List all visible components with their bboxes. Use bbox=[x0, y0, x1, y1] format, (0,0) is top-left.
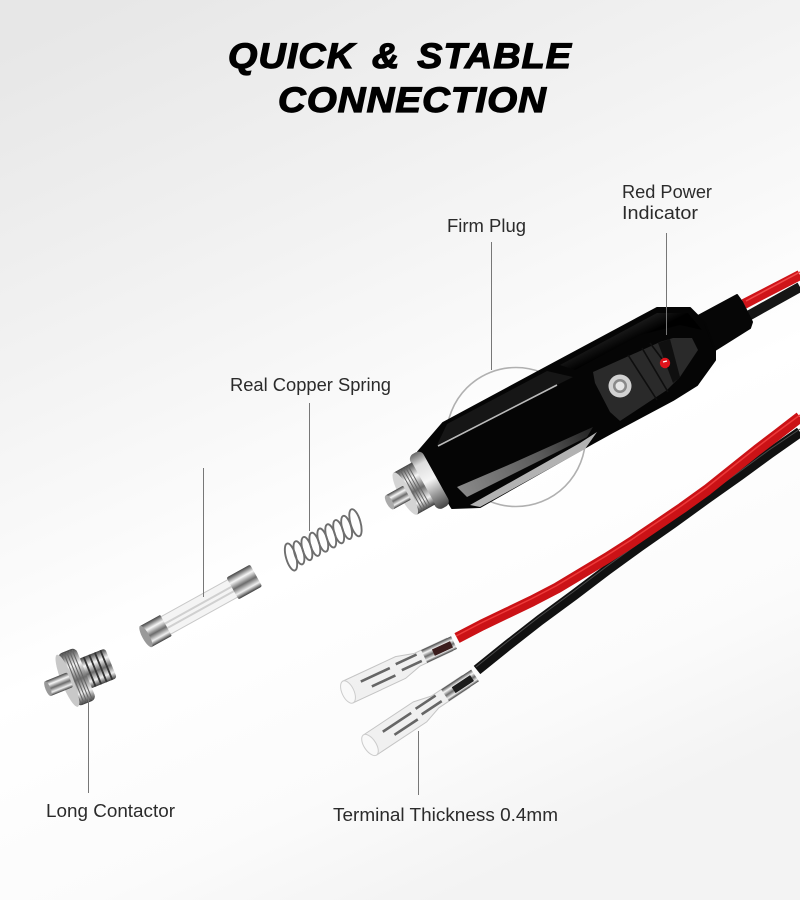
callout: red power indicator bbox=[622, 182, 712, 335]
callout: long contactor bbox=[46, 697, 175, 821]
callout: long contactor: Long Contactor bbox=[46, 801, 175, 821]
fuse bbox=[137, 564, 262, 649]
terminal: black wire bbox=[358, 665, 482, 758]
callout: red power indicator: Indicator bbox=[622, 203, 698, 223]
title bbox=[228, 36, 572, 120]
terminal: red wire bbox=[337, 632, 459, 705]
screw bbox=[608, 374, 632, 398]
title: CONNECTION bbox=[278, 80, 547, 120]
callout: terminal thickness: Terminal Thickness 0.4mm bbox=[333, 805, 558, 825]
callout: firm plug: Firm Plug bbox=[447, 216, 526, 236]
plug assembly bbox=[372, 272, 800, 531]
callout: fuse line bbox=[202, 468, 204, 597]
callout: real copper spring: Real Copper Spring bbox=[230, 375, 391, 395]
long contactor bbox=[35, 637, 121, 716]
metal collar and pin bbox=[372, 450, 451, 531]
callout: red power indicator: Red Power bbox=[622, 182, 712, 202]
switch plate bbox=[593, 338, 698, 421]
ring around plug bbox=[446, 368, 586, 506]
upper wires bbox=[744, 272, 800, 316]
plug body bbox=[418, 308, 715, 508]
body top sheen bbox=[560, 313, 702, 370]
body slot bbox=[437, 371, 573, 446]
silver strip bbox=[470, 432, 597, 507]
spring bbox=[277, 506, 369, 574]
red LED bbox=[660, 358, 670, 368]
title: QUICK & STABLE bbox=[228, 36, 572, 76]
lower wires bbox=[456, 415, 800, 670]
body highlight bbox=[457, 427, 593, 497]
strain relief bbox=[698, 295, 752, 350]
